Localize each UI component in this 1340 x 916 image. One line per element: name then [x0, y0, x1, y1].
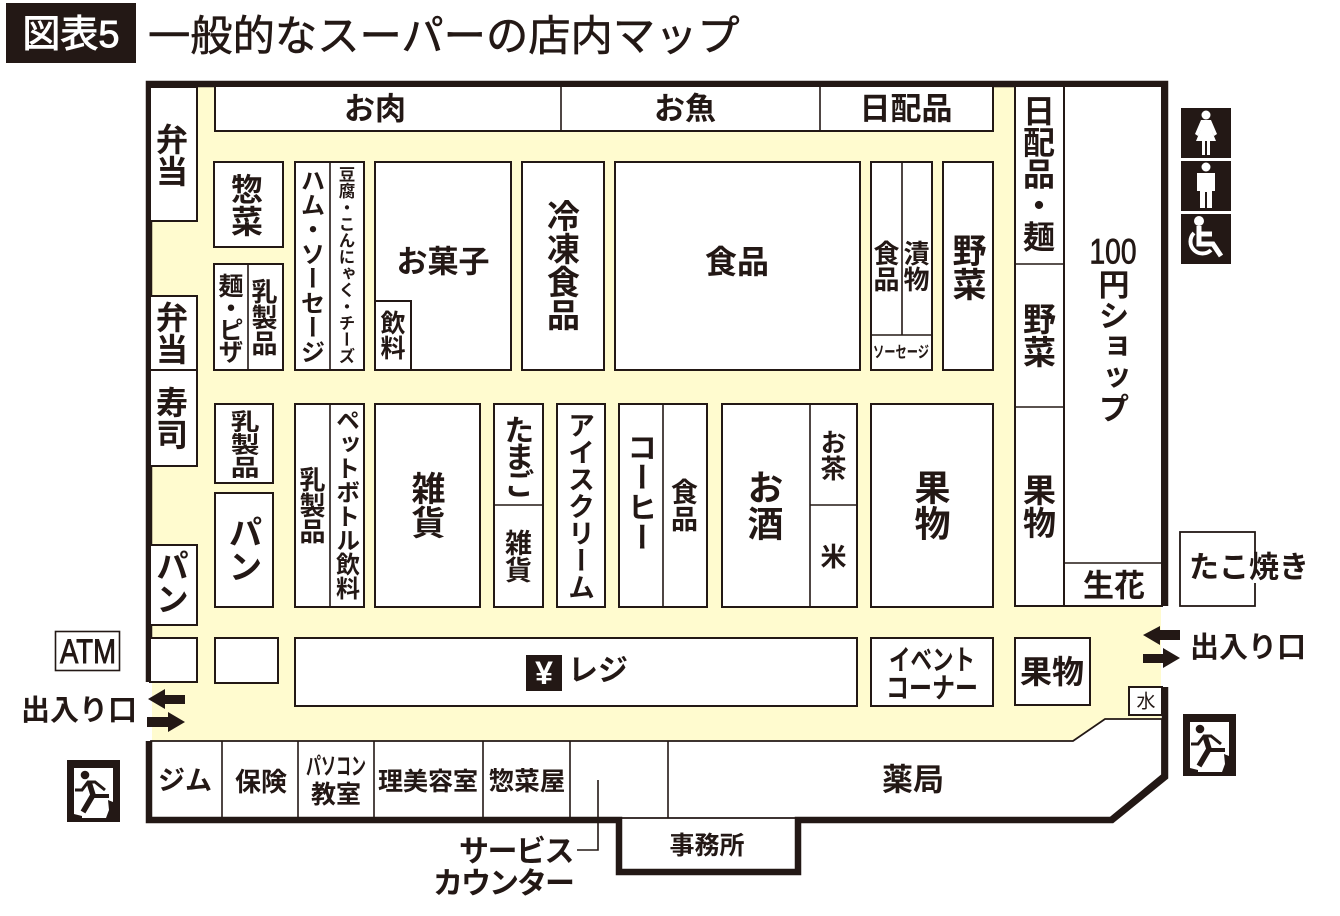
shelf: sweets and drinks: 飲料 [377, 310, 406, 360]
top row: meat, fish, daily: お肉 [344, 92, 406, 126]
right entrance label: 出入り口 [1190, 631, 1306, 664]
icon: wheelchair [1181, 214, 1231, 264]
shop: bento top: 弁当 [152, 123, 188, 187]
shelf: sweets and drinks [375, 162, 511, 370]
shelf: coffee and food: コーヒー [622, 432, 656, 552]
shelf: fruit [871, 404, 993, 607]
shelf: deli: 惣菜 [227, 173, 263, 237]
right column: daily, vegetables, fruit: 果物 [1018, 473, 1056, 539]
shelf: dairy: 乳製品 [227, 409, 260, 478]
shop: 100 yen shop and flowers [1064, 86, 1162, 606]
shelf: food, pickles, sausage: 食品 [870, 240, 900, 292]
shop: 100 yen shop and flowers: 生花 [1083, 568, 1145, 604]
right entrance arrows [1143, 626, 1180, 668]
shop: bread left: パン [152, 549, 188, 615]
registers [295, 638, 857, 706]
shelf: bread [215, 493, 273, 607]
shop: sushi: 寿司 [152, 386, 188, 450]
service counter label: サービス [459, 836, 573, 868]
fruit stand: 果物 [1020, 654, 1084, 690]
shelf: ham and tofu: 豆腐・こんにゃく・チーズ [336, 166, 355, 364]
lower tenant strip [151, 719, 1162, 818]
lower tenants [158, 741, 944, 818]
shelf: ham and tofu: ハム・ソーセージ [298, 168, 324, 364]
shelf: household goods [375, 404, 480, 607]
shelf: ice cream: アイスクリーム [564, 412, 594, 600]
shop: bento lower: 弁当 [152, 301, 188, 365]
shop: 100 yen shop and flowers: 円ショップ [1094, 268, 1128, 424]
event corner [871, 638, 993, 706]
right column: daily, vegetables, fruit: 日配品・麺 [1019, 94, 1055, 252]
ATM: ATM [60, 633, 116, 671]
registers: レジ [568, 654, 628, 688]
shelf: food, pickles, sausage [870, 162, 932, 370]
shop: bread left [150, 545, 197, 625]
shelf: dairy [215, 404, 273, 483]
water [1129, 687, 1162, 715]
shelf: ham and tofu [295, 162, 364, 370]
takoyaki stand [1180, 532, 1309, 606]
shelf: noodles and dairy [214, 264, 283, 370]
shelf: alcohol, tea, rice: お茶 [817, 429, 847, 481]
title badge: 図表5 [22, 14, 120, 56]
office: 事務所 [669, 832, 745, 860]
shop: 100 yen shop and flowers: 100 [1090, 232, 1136, 272]
floor area [152, 85, 1161, 817]
shelf: eggs and goods: 雑貨 [501, 529, 532, 583]
shelf: food, pickles, sausage: ソーセージ [873, 344, 929, 362]
icon: yen: ¥ [535, 655, 553, 691]
shelf: vegetables [943, 162, 993, 370]
shelf: sweets and drinks: お菓子 [396, 244, 490, 280]
shelf: household goods: 雑貨 [406, 471, 445, 539]
title: 一般的なスーパーの店内マップ [148, 12, 740, 60]
shelf: noodles and dairy: 乳製品 [248, 278, 278, 356]
right column: daily, vegetables, fruit [1015, 86, 1064, 606]
title badge [6, 3, 136, 63]
shelf: dairy and bottled drinks: ペットボトル飲料 [332, 408, 360, 600]
shelf: dairy and bottled drinks: 乳製品 [296, 466, 326, 544]
fruit stand [1015, 638, 1090, 705]
icon: men's restroom [1181, 161, 1231, 211]
shelf: food [615, 162, 860, 370]
lower tenants: ジム [158, 766, 212, 796]
shelf: coffee and food: 食品 [667, 478, 698, 532]
right column: daily, vegetables, fruit: 野菜 [1018, 302, 1056, 368]
icon: yen [526, 655, 562, 691]
shelf: food, pickles, sausage: 漬物 [900, 240, 930, 292]
lower tenants: 教室 [311, 781, 361, 809]
top row: meat, fish, daily [215, 86, 993, 131]
top row: meat, fish, daily: 日配品 [860, 92, 952, 126]
icon: exit right [1183, 714, 1236, 776]
shelf: bread: パン [223, 515, 261, 583]
icon: exit left [67, 760, 120, 822]
lower tenants: 保険 [235, 767, 287, 797]
shelf: food: 食品 [705, 244, 769, 280]
takoyaki stand: たこ焼き [1189, 552, 1309, 584]
shelf: ice cream [557, 404, 605, 607]
shelf: frozen food [522, 162, 604, 370]
service counter label [433, 780, 598, 900]
water: 水 [1136, 690, 1156, 712]
shop: bento lower [150, 296, 197, 370]
blank box [215, 638, 278, 683]
lower tenants: 理美容室 [378, 768, 478, 796]
shop: sushi [150, 370, 197, 466]
left entrance arrows [147, 689, 185, 732]
shelf: alcohol, tea, rice: 米 [817, 543, 847, 569]
shelf: eggs and goods [494, 404, 543, 607]
shelf: deli [214, 162, 283, 247]
shelf: frozen food: 冷凍食品 [542, 199, 580, 331]
event corner: イベント [889, 644, 975, 676]
event corner: コーナー [886, 672, 978, 704]
lower tenants: 惣菜屋 [489, 768, 565, 796]
icon: women's restroom [1181, 108, 1231, 158]
shelf: vegetables: 野菜 [947, 233, 986, 301]
blank box left [150, 638, 197, 682]
lower tenants: 薬局 [882, 762, 944, 798]
shelf: coffee and food [619, 404, 707, 607]
shelf: dairy and bottled drinks [295, 404, 364, 607]
lower tenants: パソコン [306, 754, 366, 780]
exterior walls [149, 84, 1165, 872]
left entrance label: 出入り口 [21, 694, 137, 727]
shelf: alcohol, tea, rice: お酒 [742, 469, 784, 541]
shop: bento top [150, 87, 197, 221]
shelf: eggs and goods: たまご [500, 414, 532, 498]
shelf: fruit: 果物 [910, 469, 950, 541]
service counter label: カウンター [433, 868, 573, 900]
shelf: alcohol, tea, rice [722, 404, 857, 607]
top row: meat, fish, daily: お魚 [654, 92, 716, 126]
shelf: noodles and dairy: 麺・ピザ [215, 273, 244, 364]
